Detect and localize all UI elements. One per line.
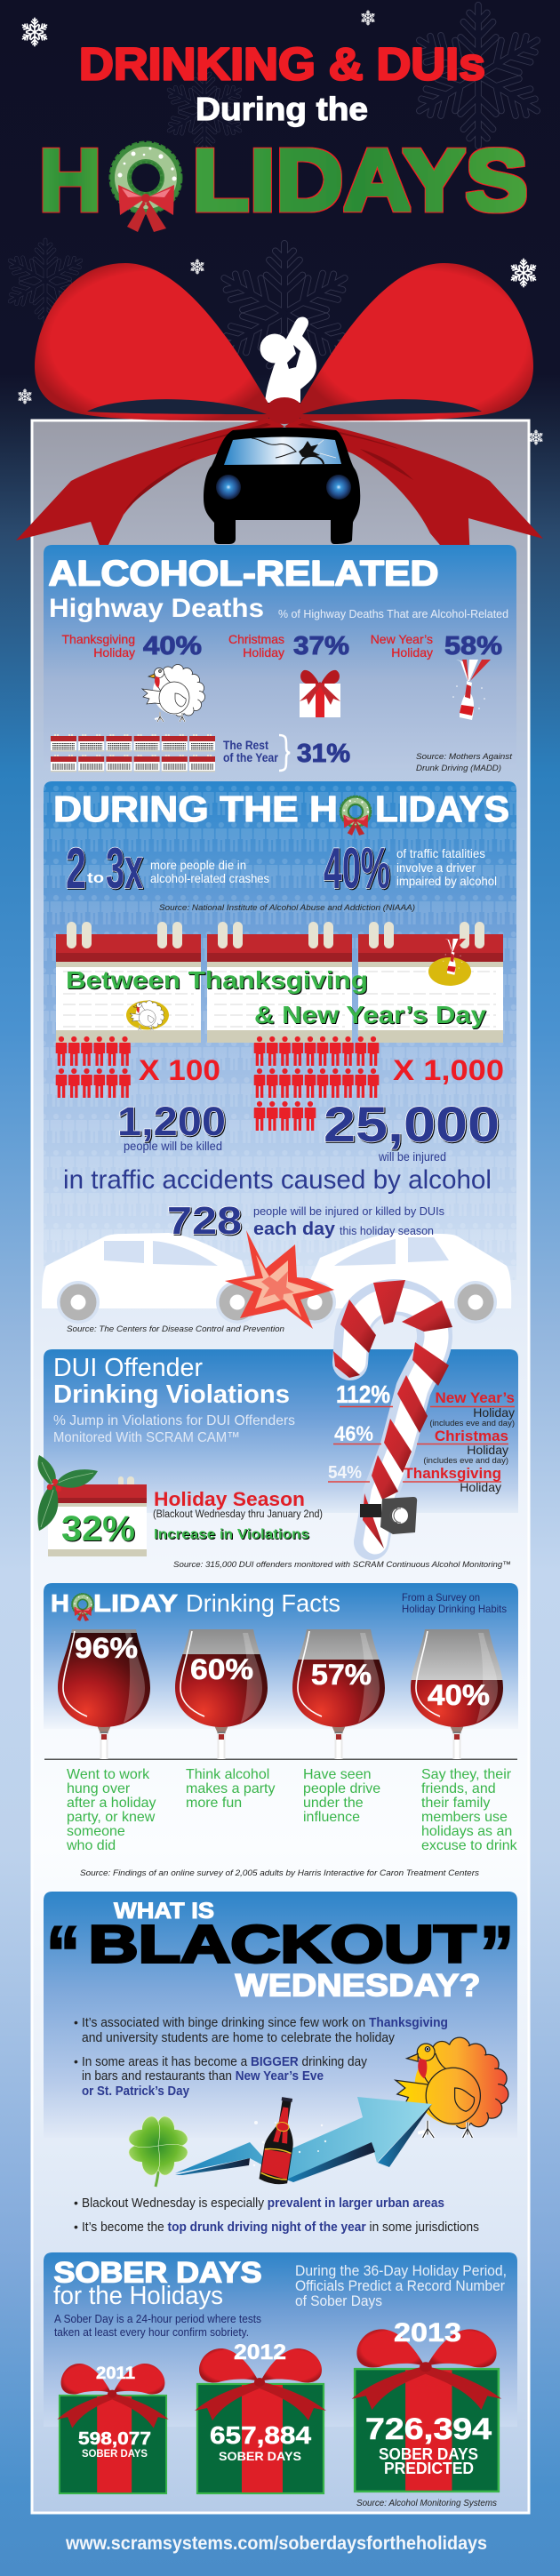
wine glass: 40 percent — [411, 1629, 503, 1759]
fact text: went to work: after a holiday — [67, 1796, 156, 1811]
shelf line — [44, 1758, 517, 1760]
bullet: urban areas: • — [74, 2196, 78, 2210]
panel: blackout wednesday — [44, 1892, 517, 2235]
bullet: binge drinking: and university students are home to celebrate the holiday — [82, 2031, 396, 2045]
source: Source: 315,000 DUI offenders monitored with SCRAM Continuous Alcohol Monitoring™ — [173, 1560, 511, 1570]
source: Drunk Driving (MADD) — [416, 764, 501, 773]
stat: new year's 112 percent: (includes eve and day) — [429, 1419, 515, 1428]
sparkles — [253, 2121, 326, 2166]
note: survey: Holiday Drinking Habits — [402, 1603, 507, 1615]
title: DRINKING & DUIs — [79, 39, 485, 89]
heading: ” — [480, 1911, 514, 1995]
stat: 25,000 injured: 25,000 — [324, 1096, 500, 1152]
stat: thanksgiving 54 percent — [328, 1463, 501, 1494]
source: Source: The Centers for Disease Control and Prevention — [67, 1324, 284, 1334]
fact text: say they: excuse to drink — [421, 1838, 518, 1853]
heading: H — [51, 1589, 69, 1617]
stat: 40 percent: of traffic fatalities — [396, 846, 485, 860]
gift: 2013: SOBER DAYS — [379, 2445, 478, 2463]
title: H — [39, 132, 101, 229]
heading: DUI Offender — [53, 1354, 203, 1382]
bullet: bigger drinking day: • — [74, 2054, 78, 2068]
stat: thanksgiving: 40% — [143, 632, 202, 660]
icon: champagne bottle — [259, 2095, 300, 2186]
source: Source: Findings of an online survey of 2,005 adults by Harris Interactive for Caron Treatment Centers — [80, 1868, 479, 1878]
heading: DURING THE H — [53, 788, 338, 829]
icon: year of calendars — [51, 734, 215, 772]
stat: 40 percent: involve a driver — [396, 860, 476, 875]
stat: 1,200 killed: 1,200 — [117, 1099, 226, 1144]
note: survey: From a Survey on — [402, 1591, 480, 1604]
text: holiday season: (Blackout Wednesday thru January 2nd) — [153, 1509, 323, 1520]
gift: 2013: PREDICTED — [384, 2460, 474, 2477]
stat: thanksgiving 54 percent: Holiday — [460, 1480, 501, 1494]
heading: WHAT IS — [114, 1899, 214, 1924]
wine glass: 96 percent: 96% — [75, 1632, 138, 1664]
stat: new year's: Holiday — [391, 645, 433, 660]
stat: 40 percent: impaired by alcohol — [396, 874, 497, 888]
text: holiday season — [153, 1488, 323, 1542]
stat: new year's — [371, 632, 502, 660]
definition — [54, 2313, 261, 2339]
fact text: say they: their family — [421, 1796, 490, 1811]
stat: new year's: 58% — [444, 632, 502, 660]
heading: Drinking Violations — [53, 1380, 290, 1409]
heading — [46, 1899, 514, 2004]
wine glass: 57 percent — [292, 1629, 385, 1759]
heading: LIDAYS — [375, 788, 509, 829]
stat: rest of the year — [223, 735, 350, 771]
definition: A Sober Day is a 24-hour period where tests — [54, 2313, 261, 2325]
fact text: say they: holidays as an — [421, 1824, 512, 1839]
stat: thanksgiving — [62, 632, 202, 660]
stat: new year's: New Year’s — [371, 632, 433, 646]
stat: 2 to 3x — [66, 836, 269, 900]
icon: four-leaf clover — [126, 2114, 190, 2187]
stat: new year's 112 percent: New Year’s — [436, 1389, 515, 1406]
text: in traffic accidents: in traffic accidents caused by alcohol — [63, 1165, 492, 1195]
stat: 2 to 3x: to — [87, 869, 104, 886]
illustration: crashed cars — [42, 1233, 511, 1324]
stat: new year's 112 percent — [336, 1380, 515, 1428]
people icons: killed — [56, 1036, 131, 1098]
stat: rest of the year: 31% — [297, 740, 350, 768]
icon: orange turkey — [396, 2037, 508, 2138]
fact text: say they: Say they, their — [421, 1767, 512, 1782]
heading: alcohol-related: ALCOHOL-RELATED — [48, 555, 439, 594]
heading: WEDNESDAY? — [235, 1968, 480, 2004]
note: 36-day period: of Sober Days — [295, 2293, 382, 2309]
note: 36-day period — [295, 2263, 507, 2309]
bullet: binge drinking — [74, 2015, 448, 2045]
calendar: 32 percent: 32% — [61, 1509, 135, 1548]
heading — [53, 2256, 261, 2310]
gift: 2011 — [57, 2364, 169, 2493]
stat: christmas 46 percent: Holiday — [467, 1443, 508, 1457]
gift: 2012: 2012 — [234, 2340, 286, 2364]
fact text: went to work: someone — [67, 1824, 125, 1839]
gift: 2011: 598,077 — [78, 2429, 151, 2449]
gift: 2011: 2011 — [96, 2364, 135, 2383]
stat: christmas 46 percent: 46% — [334, 1422, 373, 1446]
bullet: top drunk driving night: • — [74, 2220, 78, 2234]
subheading: Monitored With SCRAM CAM™ — [53, 1430, 240, 1445]
panel: DUI offender drinking violations — [37, 1280, 518, 1570]
stat: 40 percent: 40% — [324, 836, 390, 900]
stat: rest of the year: of the Year — [223, 750, 278, 764]
bullet: bigger drinking day: or St. Patrick’s Day — [82, 2084, 189, 2099]
panel: sober days — [44, 2252, 517, 2508]
stat: christmas 46 percent: (includes eve and day) — [423, 1456, 508, 1466]
heading: LIDAY — [93, 1589, 178, 1617]
icon: SCRAM device — [360, 1497, 417, 1534]
stat: christmas: Holiday — [243, 645, 284, 660]
gift: 2013: 726,394 — [365, 2412, 492, 2446]
note: survey — [402, 1591, 507, 1615]
heading: between thanksgiving and new year's day — [66, 966, 486, 1028]
stat: 2 to 3x: more people die in — [150, 858, 246, 872]
fact text: think alcohol: makes a party — [186, 1781, 275, 1796]
source: Source: Alcohol Monitoring Systems — [356, 2499, 497, 2508]
wine glass: 60 percent — [175, 1629, 268, 1759]
stat: christmas 46 percent — [333, 1422, 508, 1466]
stat: 728 per day: each day — [253, 1220, 336, 1239]
calendar: 32 percent — [48, 1476, 147, 1556]
subheading: % Jump in Violations for DUI Offenders — [53, 1413, 295, 1428]
stat: 2 to 3x: alcohol-related crashes — [150, 871, 269, 885]
wine glass: 60 percent: 60% — [190, 1653, 253, 1685]
icon: crash burst — [225, 1230, 334, 1329]
fact text: have seen: under the — [303, 1796, 364, 1811]
fact text: say they: friends, and — [421, 1781, 496, 1796]
fact text: went to work: who did — [66, 1838, 116, 1853]
bullet: urban areas: Blackout Wednesday is especially prevalent in larger urban areas — [82, 2196, 444, 2211]
heading: for the Holidays — [53, 2282, 223, 2310]
heading: BLACKOUT — [89, 1915, 476, 1973]
gift: 2011: SOBER DAYS — [82, 2449, 148, 2460]
stat: new year's 112 percent: Holiday — [473, 1405, 515, 1420]
gift: 2012: 657,884 — [210, 2421, 311, 2449]
panel: holiday drinking facts — [44, 1583, 518, 1878]
drinker silhouette — [260, 317, 316, 403]
wine glass: 40 percent: 40% — [428, 1679, 490, 1711]
source: Source: National Institute of Alcohol Abuse and Addiction (NIAAA) — [159, 903, 415, 913]
note: 36-day period: Officials Predict a Record Number — [295, 2278, 505, 2294]
stat: thanksgiving: Thanksgiving — [62, 632, 135, 646]
heading — [53, 1354, 290, 1409]
stat: 728 per day — [167, 1199, 444, 1243]
stat: thanksgiving: Holiday — [93, 645, 135, 660]
stat: christmas — [228, 632, 349, 660]
icon: white turkey — [142, 665, 204, 722]
icon: title wreath — [111, 143, 180, 232]
decorative dark outline snowflakes — [4, 5, 546, 382]
subheading — [53, 1413, 295, 1445]
panel: alcohol-related highway deaths — [44, 545, 516, 773]
heading — [51, 1589, 340, 1621]
bullet: binge drinking: • — [74, 2015, 78, 2029]
bullet: top drunk driving night: It’s become the top drunk driving night of the year in some jurisdictions — [82, 2220, 479, 2235]
stat: new year's 112 percent: 112% — [336, 1380, 390, 1408]
illustration: candy cane — [333, 1280, 452, 1548]
fact text: have seen: influence — [303, 1810, 360, 1825]
gift: 2013: 2013 — [394, 2318, 461, 2348]
subheading: % of Highway Deaths That are Alcohol-Related — [278, 608, 508, 620]
heading: between thanksgiving and new year's day: & New Year’s Day — [254, 1001, 486, 1028]
definition: taken at least every hour confirm sobriety. — [54, 2326, 249, 2339]
gift: 2012 — [195, 2340, 326, 2493]
fact text: think alcohol: Think alcohol — [186, 1767, 269, 1782]
multiplier x 100: X 100 — [139, 1054, 220, 1086]
stat: rest of the year: The Rest — [223, 738, 268, 752]
bullet: bigger drinking day: In some areas it has become a BIGGER drinking day — [82, 2055, 368, 2069]
heading — [53, 788, 509, 836]
title: LIDAYS — [192, 132, 528, 229]
source — [416, 752, 512, 773]
heading: highway deaths: Highway Deaths — [49, 594, 264, 623]
multiplier x 1,000: X 1,000 — [393, 1054, 504, 1086]
big red bow — [16, 263, 543, 582]
panel: during the holidays — [42, 781, 516, 1334]
wine glass: 96 percent — [58, 1629, 150, 1759]
fact text: think alcohol: more fun — [186, 1796, 242, 1811]
stat: christmas 46 percent: Christmas — [435, 1428, 508, 1444]
white frame — [32, 420, 529, 2513]
stat: 728 per day: this holiday season — [340, 1224, 434, 1237]
text: holiday season: Increase in Violations — [154, 1527, 309, 1542]
source: Source: Mothers Against — [416, 752, 512, 762]
icon: holly — [37, 1455, 98, 1531]
heading: SOBER DAYS — [53, 2256, 261, 2288]
people icons: injured — [254, 1036, 379, 1131]
fact text: have seen: Have seen — [303, 1767, 372, 1782]
gift: 2013 — [352, 2318, 501, 2492]
car with cracked windshield — [204, 428, 360, 544]
icon: gift — [300, 670, 340, 717]
stat: christmas: Christmas — [228, 632, 284, 646]
text: holiday season: Holiday Season — [154, 1488, 305, 1510]
heading: Drinking Facts — [186, 1589, 340, 1617]
footer url: www.scramsystems.com/soberdaysfortheholidays — [65, 2533, 487, 2554]
stat: 40 percent — [324, 836, 497, 900]
bullet: bigger drinking day: in bars and restaurants than New Year’s Eve — [82, 2069, 324, 2084]
stat: 728 per day: people will be injured or killed by DUIs — [253, 1204, 444, 1218]
stat: 1,200 killed: people will be killed — [124, 1140, 222, 1153]
small white snowflakes — [18, 11, 543, 444]
wine glass: 57 percent: 57% — [311, 1659, 372, 1691]
stat: 2 to 3x: 3x — [106, 836, 143, 900]
fact text: have seen: people drive — [303, 1781, 380, 1796]
icon: champagne — [452, 660, 491, 720]
fact text: went to work: hung over — [67, 1781, 131, 1796]
title: During the — [196, 91, 368, 127]
stat: 728 per day: 728 — [167, 1199, 242, 1243]
stat: christmas: 37% — [293, 632, 349, 660]
calendars — [56, 922, 503, 1043]
fact text: went to work: party, or knew — [67, 1810, 156, 1825]
stat: thanksgiving 54 percent: Thanksgiving — [404, 1465, 501, 1482]
heading: “ — [46, 1911, 80, 1995]
stat: 25,000 injured: will be injured — [378, 1150, 446, 1164]
title — [39, 39, 528, 229]
heading: between thanksgiving and new year's day: Between Thanksgiving — [66, 966, 368, 994]
bullet: bigger drinking day — [74, 2054, 368, 2099]
stat: thanksgiving 54 percent: 54% — [328, 1463, 362, 1483]
bullet: binge drinking: It’s associated with binge drinking since few work on Thanksgiving — [82, 2016, 448, 2030]
icon: rising arrow — [175, 2097, 432, 2182]
fact text: say they: members use — [421, 1810, 508, 1825]
fact text: went to work: Went to work — [67, 1767, 150, 1782]
stat: 2 to 3x: 2 — [66, 836, 86, 900]
gift: 2012: SOBER DAYS — [219, 2449, 301, 2463]
note: 36-day period: During the 36-Day Holiday Period, — [295, 2263, 507, 2279]
